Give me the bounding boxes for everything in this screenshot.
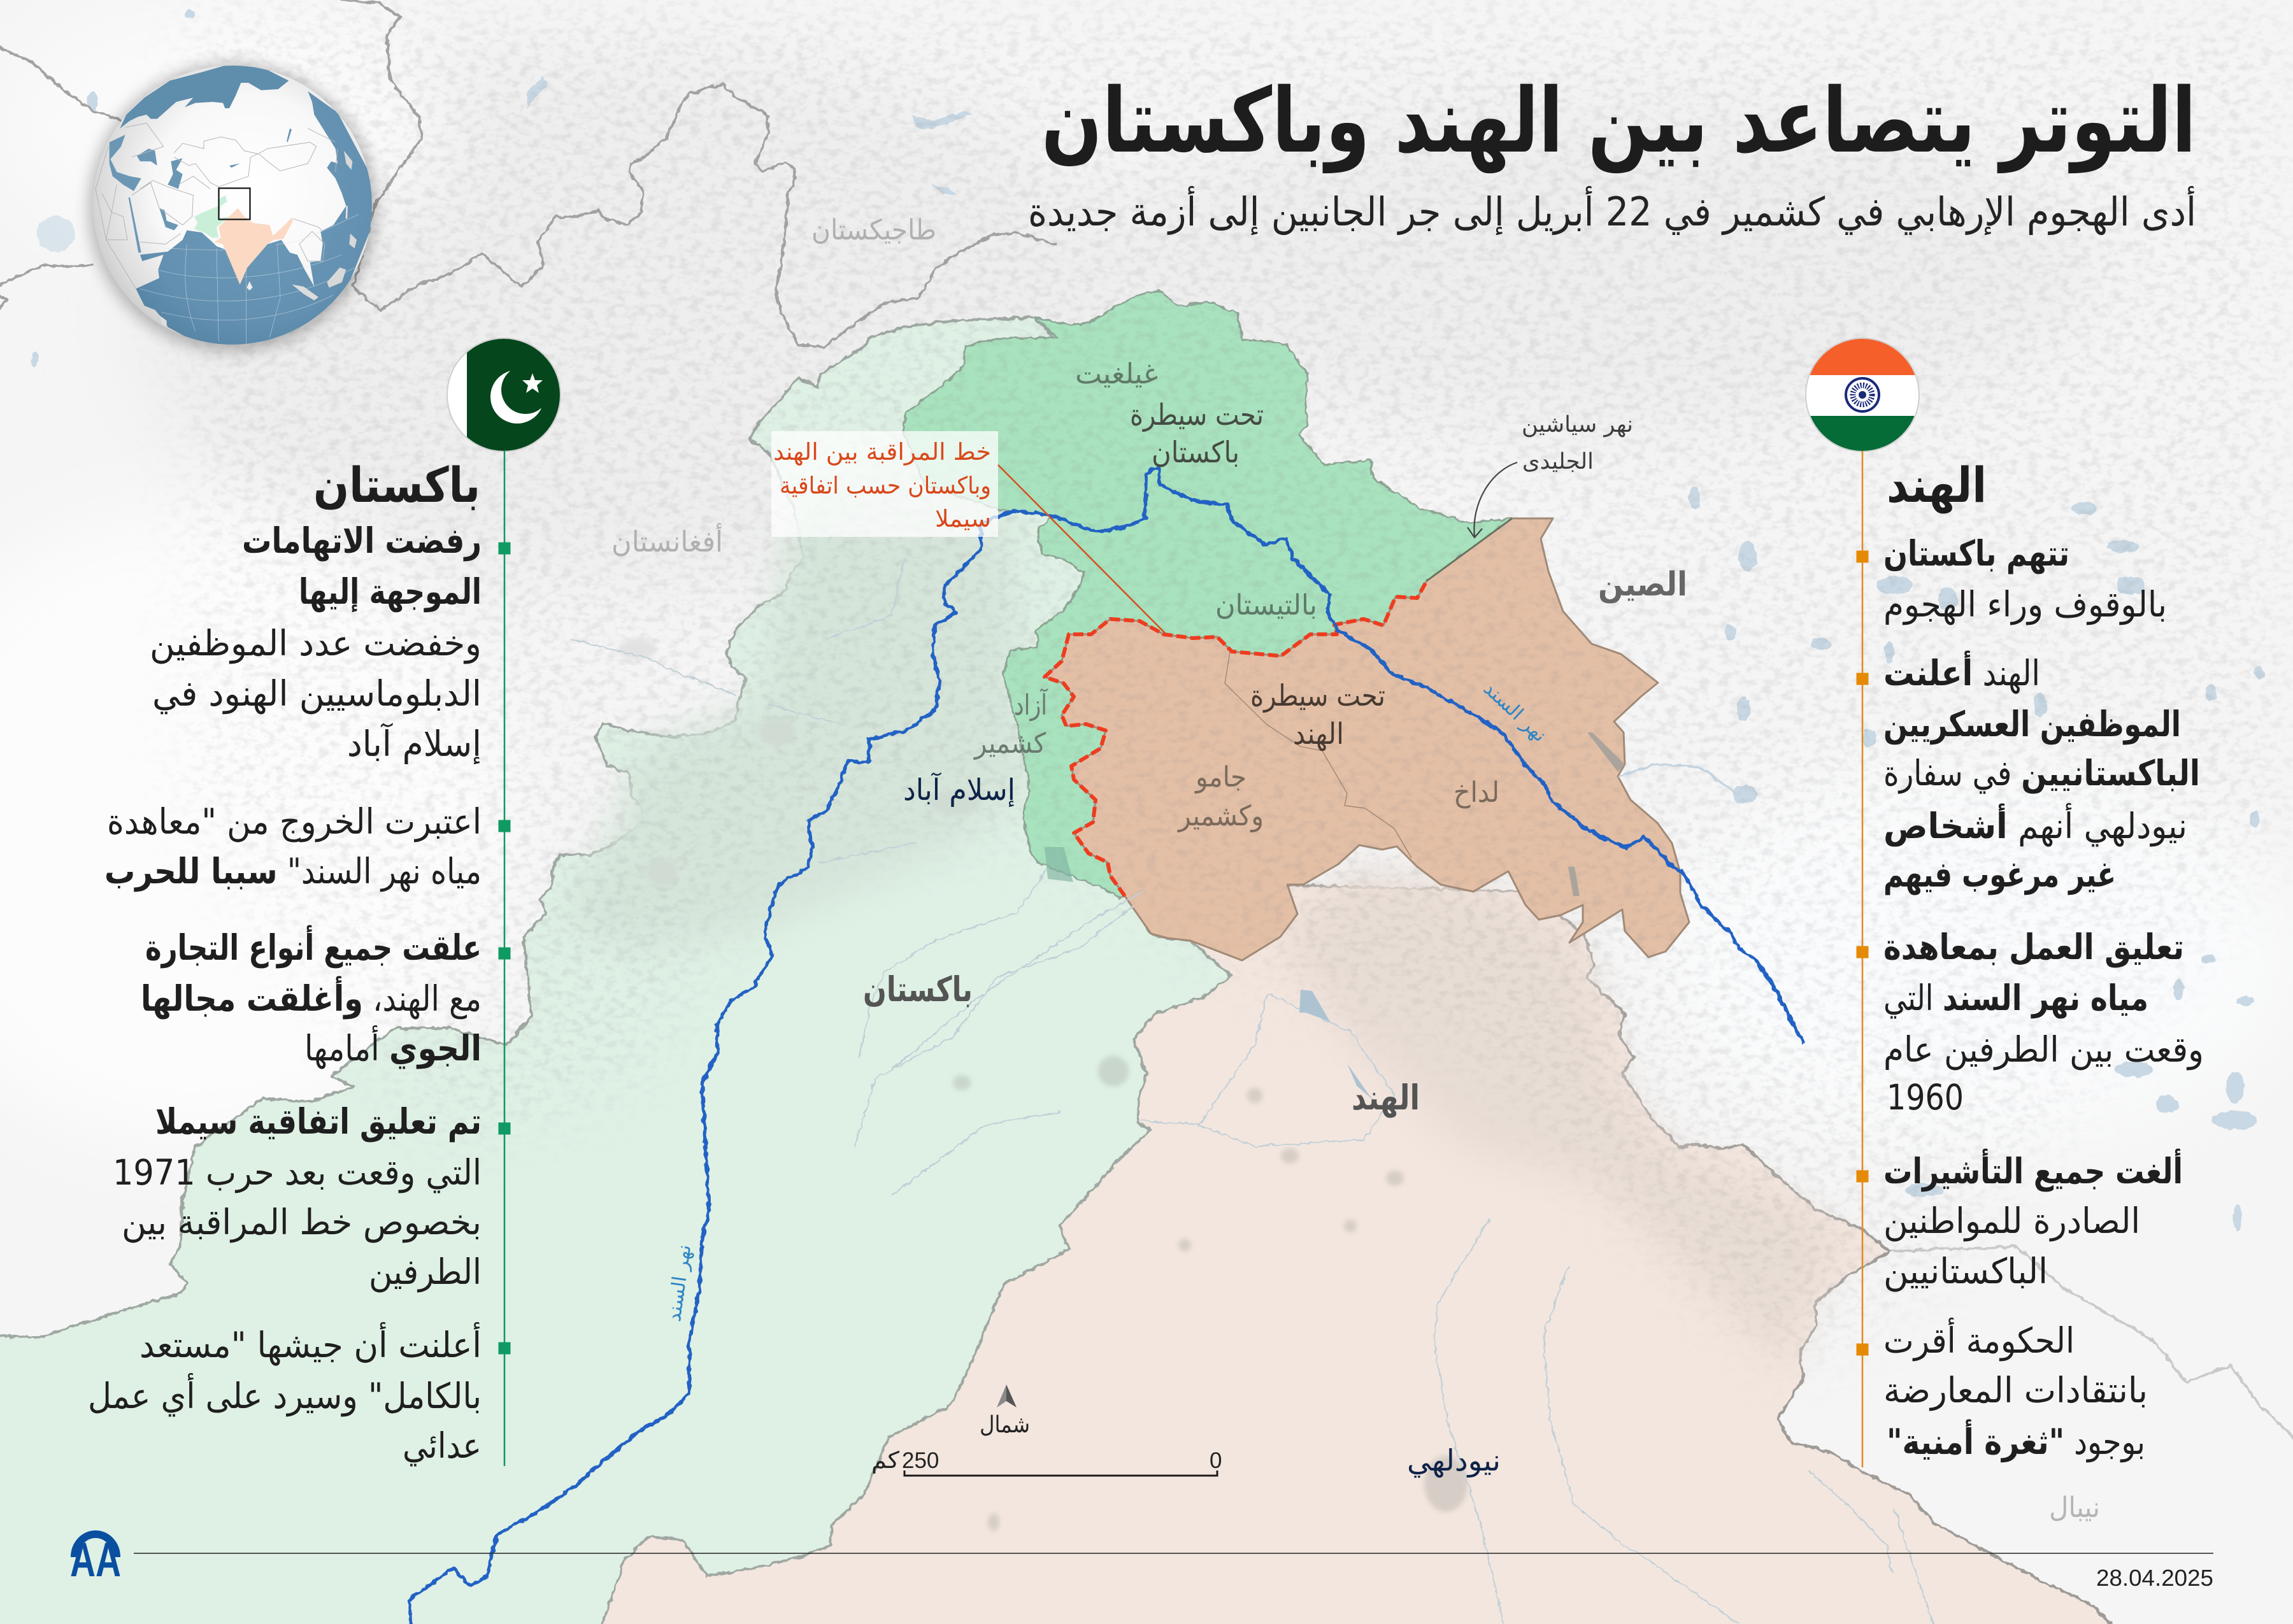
text: item 3 bbox=[141, 925, 482, 1069]
text: item 4: بخصوص خط المراقبة بين bbox=[122, 1202, 482, 1243]
map labels: countries: باكستان bbox=[863, 969, 973, 1009]
map labels: Kashmir regions: تحت سيطرة bbox=[1250, 678, 1385, 713]
globe locator bbox=[89, 64, 376, 352]
bullets bbox=[498, 543, 511, 1354]
map labels: Kashmir regions: بالتيستان bbox=[1215, 589, 1317, 622]
bullets bbox=[1856, 550, 1869, 1355]
text: item 5: بانتقادات المعارضة bbox=[1883, 1370, 2148, 1411]
heading: Pakistan: باكستان bbox=[313, 457, 480, 513]
map labels: Kashmir regions: الهند bbox=[1293, 716, 1344, 751]
text: item 1 bbox=[150, 520, 482, 765]
line: Siachen glacier boundary bbox=[1427, 518, 1512, 581]
scale bar bbox=[871, 1448, 1222, 1476]
text: item 1: بالوقوف وراء الهجوم bbox=[1883, 584, 2167, 625]
map labels: Kashmir regions: لداخ bbox=[1454, 776, 1499, 809]
map labels: countries: الهند bbox=[1352, 1078, 1420, 1118]
text: item 4: التي وقعت بعد حرب 1971 bbox=[113, 1152, 482, 1193]
scale bar: 250 bbox=[902, 1448, 939, 1473]
text: item 4: الباكستانيين bbox=[1883, 1251, 2048, 1292]
flag: India bbox=[1803, 338, 1924, 454]
text: item 4: ألغت جميع التأشيرات bbox=[1883, 1148, 2183, 1192]
footer rule bbox=[134, 1553, 2213, 1554]
text: item 2: الباكستانيين في سفارة bbox=[1883, 753, 2200, 794]
text: item 5: عدائي bbox=[403, 1425, 482, 1467]
text: item 2: مياه نهر السند" سببا للحرب bbox=[104, 851, 482, 892]
text: item 1: رفضت الاتهامات bbox=[242, 520, 482, 562]
map labels: countries: نيبال bbox=[2049, 1492, 2100, 1524]
callout: line of control label: خط المراقبة بين الهند bbox=[773, 438, 991, 466]
text: item 2 bbox=[104, 801, 482, 892]
subtitle: أدى الهجوم الإرهابي في كشمير في 22 أبريل إلى جر الجانبين إلى أزمة جديدة bbox=[1028, 186, 2196, 236]
callout: line of control label: وباكستان حسب اتفاقية bbox=[780, 472, 991, 499]
text: item 2 bbox=[1883, 650, 2200, 895]
callout: line of control label bbox=[771, 431, 1166, 634]
text: item 4: الطرفين bbox=[369, 1251, 482, 1292]
text: item 5 bbox=[1883, 1318, 2148, 1462]
text: item 2: غير مرغوب فيهم bbox=[1883, 854, 2116, 895]
text: item 3: علقت جميع أنواع التجارة bbox=[145, 925, 482, 969]
text: item 1: تتهم باكستان bbox=[1883, 533, 2069, 574]
panel: Pakistan measures bbox=[88, 450, 511, 1467]
text: item 1 bbox=[1883, 533, 2167, 625]
labels: Indus river bbox=[663, 678, 1551, 1323]
map labels: Kashmir regions: نيودلهي bbox=[1407, 1443, 1501, 1478]
text: item 5: الحكومة أقرت bbox=[1883, 1318, 2075, 1361]
map labels: Kashmir regions: إسلام آباد bbox=[903, 773, 1015, 807]
text: item 4: الصادرة للمواطنين bbox=[1883, 1200, 2140, 1241]
region: India bbox=[561, 866, 2147, 1624]
text: item 2: اعتبرت الخروج من "معاهدة bbox=[107, 801, 482, 843]
north arrow: شمال bbox=[980, 1412, 1030, 1438]
text: item 5: بالكامل" وسيرد على أي عمل bbox=[88, 1373, 482, 1417]
label: Siachen glacier with arrow bbox=[1468, 412, 1633, 538]
globe: India bbox=[215, 208, 293, 285]
globe: borders bbox=[96, 123, 338, 288]
scale bar: 0 bbox=[1210, 1448, 1222, 1473]
map labels: Kashmir regions bbox=[903, 358, 1501, 1478]
text: item 5: أعلنت أن جيشها "مستعد bbox=[139, 1322, 482, 1366]
map labels: Kashmir regions: غيلغيت bbox=[1075, 358, 1158, 390]
text: item 2: الموظفين العسكريين bbox=[1883, 704, 2181, 745]
text: item 3: 1960 bbox=[1887, 1077, 1964, 1118]
region: India-controlled Kashmir bbox=[1045, 518, 1689, 960]
map labels: Kashmir regions: جامو bbox=[1194, 761, 1247, 794]
globe: grid bbox=[140, 215, 359, 344]
region: Pakistan-controlled Kashmir (Gilgit-Baltistan and Azad Kashmir) bbox=[903, 290, 1512, 898]
map labels: Kashmir regions: كشمير bbox=[973, 727, 1046, 760]
map labels: countries: طاجيكستان bbox=[811, 214, 936, 246]
globe: Pakistan bbox=[194, 196, 229, 238]
text: item 1: إسلام آباد bbox=[347, 723, 482, 765]
line of control bbox=[1045, 581, 1427, 896]
map labels: countries: أفغانستان bbox=[611, 523, 723, 559]
flag: Pakistan bbox=[447, 338, 569, 452]
text: item 1: الموجهة إليها bbox=[299, 571, 482, 613]
text: item 3: تعليق العمل بمعاهدة bbox=[1883, 927, 2184, 968]
map labels: Kashmir regions: باكستان bbox=[1152, 435, 1239, 469]
callout: line of control label: سيملا bbox=[935, 505, 991, 532]
text: item 5: بوجود "ثغرة أمنية" bbox=[1887, 1419, 2145, 1462]
text: item 1: وخفضت عدد الموظفين bbox=[150, 623, 482, 664]
cities and rivers (faint) bbox=[571, 559, 1933, 1624]
panel: India measures bbox=[1856, 451, 2204, 1467]
terrain shading bbox=[191, 0, 2292, 1342]
label: Siachen glacier with arrow: الجليدى bbox=[1522, 449, 1594, 474]
scale bar: كم bbox=[871, 1448, 900, 1474]
text: item 1: الدبلوماسيين الهنود في bbox=[152, 673, 482, 715]
map labels: Kashmir regions: آزاد bbox=[1014, 688, 1048, 722]
map labels: countries bbox=[611, 214, 2100, 1524]
text: item 4: تم تعليق اتفاقية سيملا bbox=[155, 1101, 482, 1143]
Indus river bbox=[410, 467, 1804, 1624]
labels: Indus river: نهر السند bbox=[663, 1243, 696, 1323]
logo: Anadolu Agency: AA bbox=[70, 1533, 121, 1587]
text: item 4 bbox=[1883, 1148, 2183, 1292]
text: item 2: الهند أعلنت bbox=[1883, 650, 2040, 694]
labels: Indus river: نهر السند bbox=[1479, 678, 1551, 746]
label: Siachen glacier with arrow: نهر سياشين bbox=[1522, 412, 1633, 438]
text: item 3: وقعت بين الطرفين عام bbox=[1883, 1029, 2204, 1071]
text: item 3: الجوي أمامها bbox=[304, 1025, 482, 1069]
globe oceans bbox=[110, 64, 376, 350]
text: item 5 bbox=[88, 1322, 482, 1467]
text: item 4 bbox=[113, 1101, 482, 1292]
text: item 3: مياه نهر السند التي bbox=[1883, 978, 2148, 1019]
text: item 2: نيودلهي أنهم أشخاص bbox=[1883, 803, 2187, 847]
map labels: Kashmir regions: تحت سيطرة bbox=[1130, 397, 1264, 432]
region: Pakistan bbox=[0, 317, 1231, 1624]
north arrow bbox=[980, 1385, 1030, 1438]
text: item 3 bbox=[1883, 927, 2204, 1118]
date: 28.04.2025 bbox=[2096, 1565, 2213, 1591]
map labels: Kashmir regions: وكشمير bbox=[1177, 800, 1264, 832]
text: item 3: مع الهند، وأغلقت مجالها bbox=[141, 976, 482, 1020]
map labels: countries: الصين bbox=[1598, 566, 1687, 604]
heading: India: الهند bbox=[1887, 457, 1987, 514]
